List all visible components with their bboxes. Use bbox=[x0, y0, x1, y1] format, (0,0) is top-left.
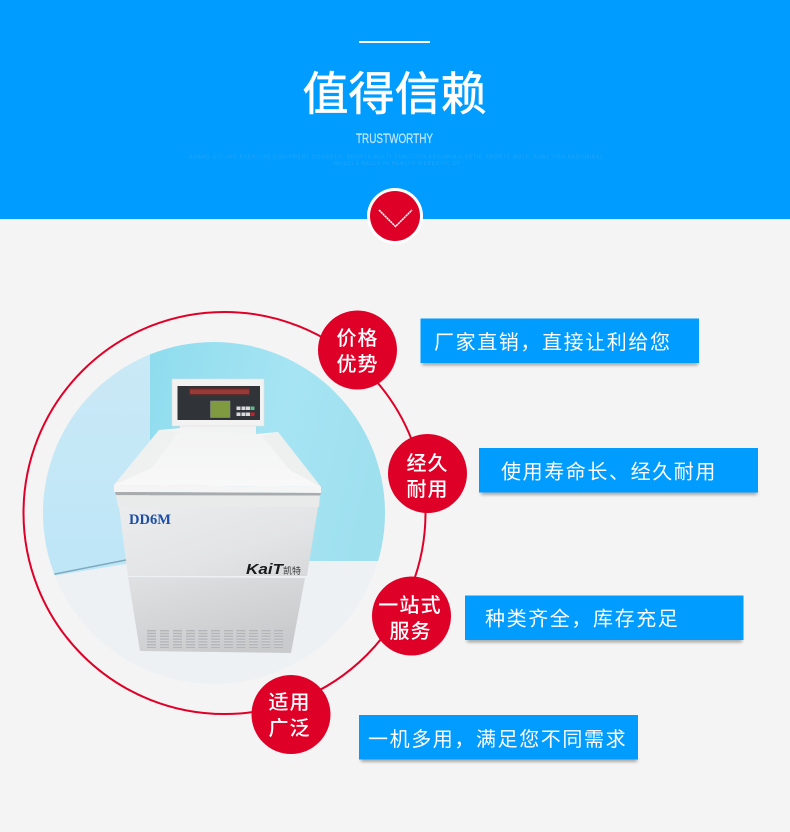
product photo disc bbox=[43, 342, 385, 576]
callout: long service life bbox=[479, 448, 758, 494]
bubble: price advantage: 价格 bbox=[336, 327, 378, 350]
model label: DD6M bbox=[129, 512, 171, 528]
small english caption: MUSCLE BELLY IN HEALTH WEBESTIC SP bbox=[334, 161, 461, 167]
callout: full range in stock bbox=[465, 596, 744, 642]
subtitle: TRUSTWORTHY bbox=[356, 130, 433, 146]
control panel bbox=[172, 379, 264, 437]
lower body bbox=[128, 577, 305, 653]
bubble: wide application: 广泛 bbox=[268, 717, 310, 740]
centrifuge machine bbox=[114, 379, 321, 653]
bubble: wide application bbox=[252, 675, 330, 754]
bubble: price advantage: 优势 bbox=[336, 353, 378, 376]
upper body bbox=[119, 507, 318, 576]
header banner bbox=[0, 0, 790, 219]
small english caption bbox=[189, 154, 603, 167]
small english caption: BOARD SIT-UPS EXERCISE EQUIPMENT DOMESTIC SPORTS MULTI-FUNCTION ABDOMINALESTIC SPORTS MULTI-FUNCTION ABDOMINAL bbox=[189, 154, 603, 160]
vents bbox=[147, 630, 283, 648]
callout: multi-purpose bbox=[359, 715, 638, 762]
bubble: wide application: 适用 bbox=[268, 691, 310, 714]
bubble: one-stop service: 一站式 bbox=[378, 594, 442, 617]
bubble: durable bbox=[388, 434, 467, 513]
lid bbox=[114, 428, 321, 507]
bubble: price advantage bbox=[318, 310, 397, 390]
callout: full range in stock: 种类齐全，库存充足 bbox=[485, 608, 679, 630]
callout: long service life: 使用寿命长、经久耐用 bbox=[501, 460, 717, 484]
callout: factory direct bbox=[420, 318, 699, 365]
title: 值得信赖 bbox=[302, 68, 486, 120]
callout: factory direct: 厂家直销，直接让利给您 bbox=[434, 331, 672, 354]
callout: multi-purpose: 一机多用，满足您不同需求 bbox=[368, 728, 627, 751]
bubble: one-stop service: 服务 bbox=[390, 620, 432, 643]
icon: chevron badge bbox=[367, 188, 423, 244]
red ring bbox=[24, 312, 426, 714]
bubble: durable: 耐用 bbox=[406, 478, 448, 501]
brand logo: 凯特 bbox=[283, 565, 301, 576]
brand logo bbox=[246, 561, 301, 578]
bubble: durable: 经久 bbox=[406, 452, 448, 475]
bubble: one-stop service bbox=[372, 576, 451, 656]
brand logo: KaiT bbox=[246, 561, 285, 578]
